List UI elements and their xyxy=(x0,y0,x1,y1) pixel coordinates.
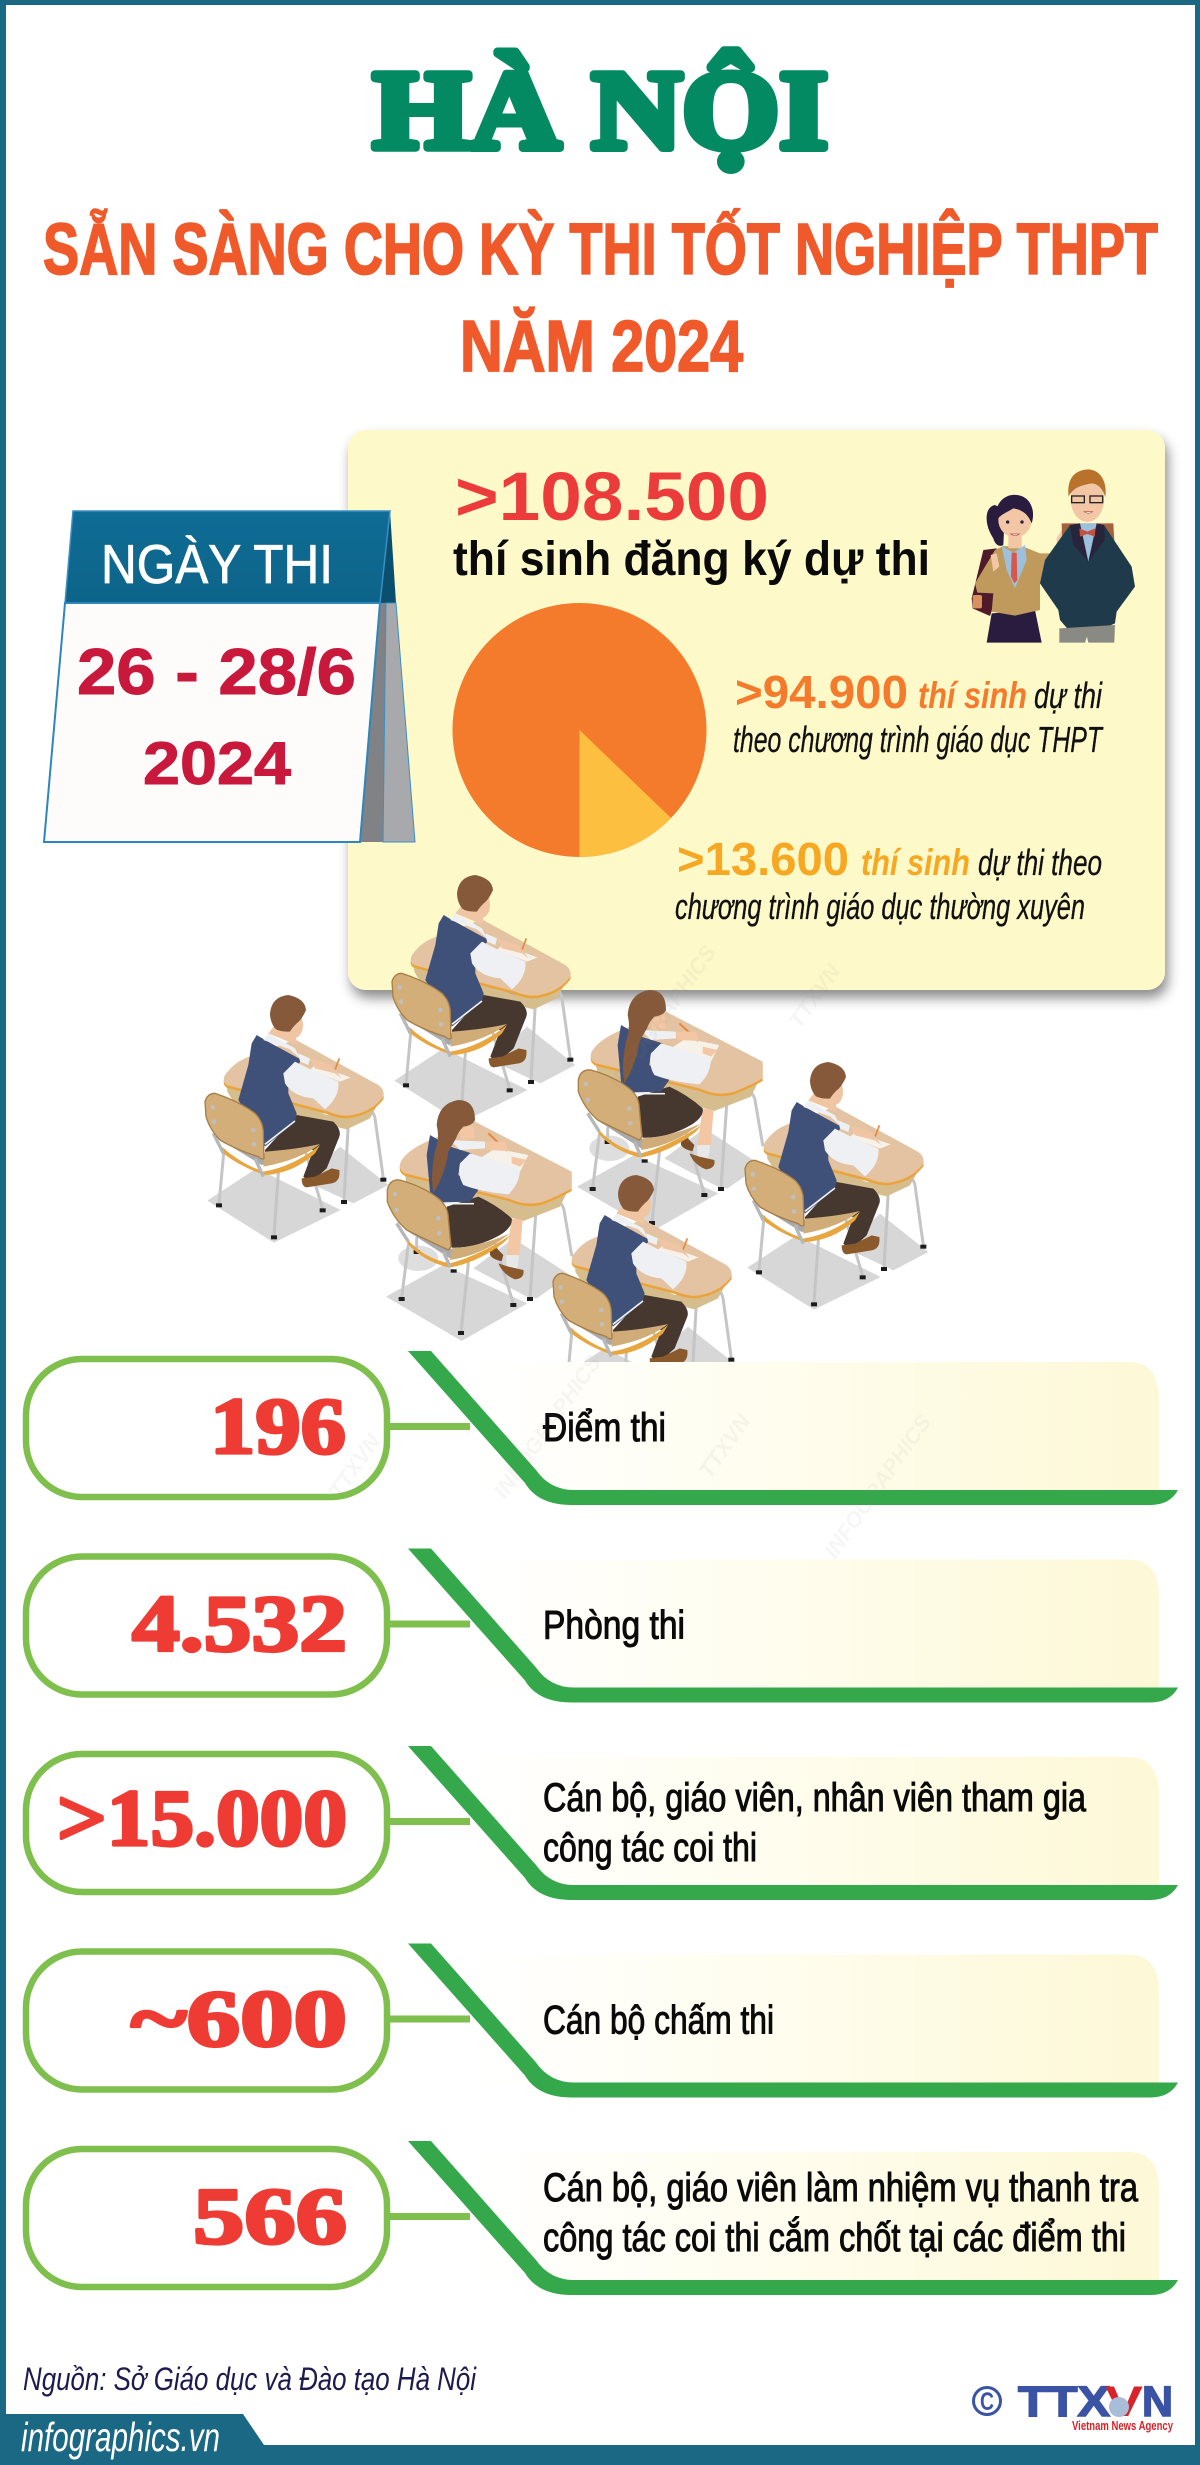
number: 566 xyxy=(193,2171,347,2261)
subtitle: NĂM 2024 xyxy=(460,307,743,387)
title: HÀ NỘI xyxy=(373,49,828,173)
row: exam rooms xyxy=(26,1548,1178,1702)
pie legend: continuing education: >13.600 xyxy=(677,833,849,885)
logo: TTXVN: TTX xyxy=(1018,2378,1110,2426)
watermark text: INFOGRAPHICS xyxy=(604,940,721,1093)
pie legend: continuing education: dự thi theo xyxy=(978,842,1102,883)
total candidates caption: thí sinh đăng ký dự thi xyxy=(453,533,930,586)
illustration: students at exam desks xyxy=(205,875,928,1423)
exam date: 26 - 28/6 xyxy=(77,635,356,708)
row: invigilators xyxy=(26,1746,1178,1900)
label: Cán bộ chấm thi xyxy=(543,1998,774,2042)
number: 196 xyxy=(210,1381,346,1471)
exam year: 2024 xyxy=(143,730,292,797)
label: Phòng thi xyxy=(543,1604,685,1648)
pie legend: THPT: thí sinh xyxy=(918,675,1027,716)
watermark text: TTXVN xyxy=(694,1409,756,1483)
total candidates number: >108.500 xyxy=(455,458,769,535)
pie legend: THPT: >94.900 xyxy=(735,666,908,718)
watermark text: TTXVN xyxy=(784,959,846,1033)
watermark text xyxy=(324,940,936,1563)
watermark text: INFOGRAPHICS xyxy=(819,1410,936,1563)
pie legend: continuing education: thí sinh xyxy=(861,842,970,883)
website label: infographics.vn xyxy=(21,2414,220,2460)
subtitle xyxy=(43,208,1158,387)
watermark text: TTXVN xyxy=(324,1429,386,1503)
icon: two students xyxy=(972,469,1135,643)
label xyxy=(543,2166,1139,2260)
pie chart xyxy=(452,603,706,857)
logo: TTXVN: V xyxy=(1105,2378,1143,2426)
number: 4.532 xyxy=(132,1578,347,1668)
panel: candidates xyxy=(348,430,1165,990)
label: Điểm thi xyxy=(543,1406,666,1450)
number: >15.000 xyxy=(57,1773,347,1863)
logo: TTXVN: C xyxy=(980,2388,994,2416)
pie legend: continuing education xyxy=(675,833,1102,927)
logo: TTXVN: N xyxy=(1142,2378,1173,2426)
logo: TTXVN xyxy=(974,2378,1173,2433)
pie legend: THPT xyxy=(733,666,1104,760)
row: inspectors xyxy=(26,2141,1178,2295)
number: ~600 xyxy=(131,1974,347,2064)
row: markers xyxy=(26,1944,1178,2098)
calendar heading: NGÀY THI xyxy=(101,533,333,595)
label: Cán bộ, giáo viên, nhân viên tham gia xyxy=(543,1776,1087,1820)
label xyxy=(543,1776,1087,1870)
pie legend: THPT: dự thi xyxy=(1034,675,1103,716)
row: exam sites xyxy=(26,1351,1178,1505)
panel: exam dates calendar xyxy=(44,511,415,842)
panel background xyxy=(348,430,1165,990)
source note: Nguồn: Sở Giáo dục và Đào tạo Hà Nội xyxy=(23,2361,477,2397)
watermark text: INFOGRAPHICS xyxy=(489,1350,606,1503)
label: công tác coi thi xyxy=(543,1826,757,1870)
